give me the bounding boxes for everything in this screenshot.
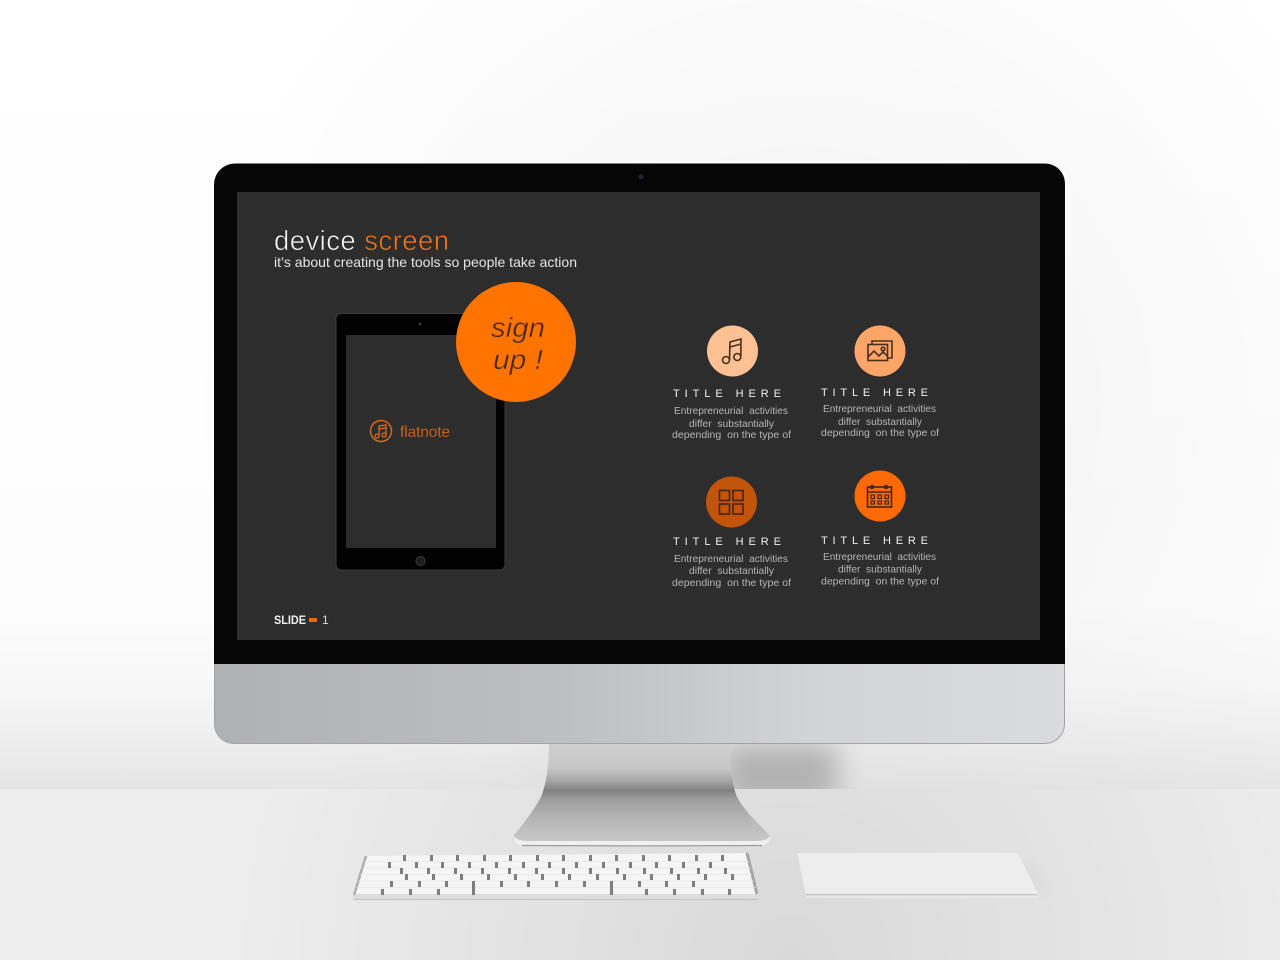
keyboard [353,853,776,900]
stand base rim [514,836,770,846]
trackpad rim [806,895,1038,898]
slide screen [237,192,1040,640]
wall shadow behind stand [525,744,837,804]
feature text: Entrepreneurial activities [674,553,788,565]
feature text: differ substantially [838,564,923,576]
flatnote logo: flatnote [400,424,450,441]
home button [416,556,425,566]
feature text: depending on the type of [672,577,791,589]
feature text: differ substantially [838,416,923,428]
feature text: Entrepreneurial activities [674,405,788,417]
desk surface [0,789,1280,960]
sign up badge: sign [491,312,545,343]
feature: image [821,326,939,439]
feature title: TITLE HERE [673,536,781,548]
key rows [356,862,756,888]
key gaps [381,855,734,895]
feature: grid [672,476,791,589]
flatnote logo [370,420,450,442]
feature text: depending on the type of [821,427,939,439]
feature text: depending on the type of [672,429,791,441]
feature text: Entrepreneurial activities [823,551,936,563]
monitor stand [513,744,770,846]
feature title: TITLE HERE [821,535,928,547]
monitor [213,162,1067,744]
feature text [672,553,791,589]
trackpad shadow [1022,860,1046,894]
feature title: TITLE HERE [821,387,928,399]
slide number [274,613,329,627]
feature title: TITLE HERE [673,388,781,400]
feature text [821,403,939,439]
tablet [336,314,505,570]
icon: pictures [854,326,906,376]
trackpad top [797,853,1038,895]
icon: grid [706,476,757,528]
feature text: differ substantially [689,565,775,577]
monitor bezel [214,164,1065,664]
icon: music note [707,326,758,376]
sign up badge: up ! [493,344,543,375]
trackpad [797,853,1046,898]
feature text: depending on the type of [821,576,939,588]
webcam [638,174,644,180]
feature text [672,405,791,441]
feature text: Entrepreneurial activities [823,403,936,415]
feature: calendar [821,470,939,588]
feature text [821,551,939,588]
monitor chin [214,660,1064,744]
slide number: 1 [322,613,329,627]
monitor outer edge [213,162,1067,662]
keyboard shadow [758,860,776,896]
sign up badge [456,282,576,402]
feature text: differ substantially [689,418,775,430]
subtitle: it’s about creating the tools so people take action [274,254,577,270]
slide number: SLIDE [274,613,306,627]
title: device screen [274,225,449,256]
feature: music [672,326,791,441]
icon: calendar [854,470,906,522]
keyboard body [353,853,759,899]
